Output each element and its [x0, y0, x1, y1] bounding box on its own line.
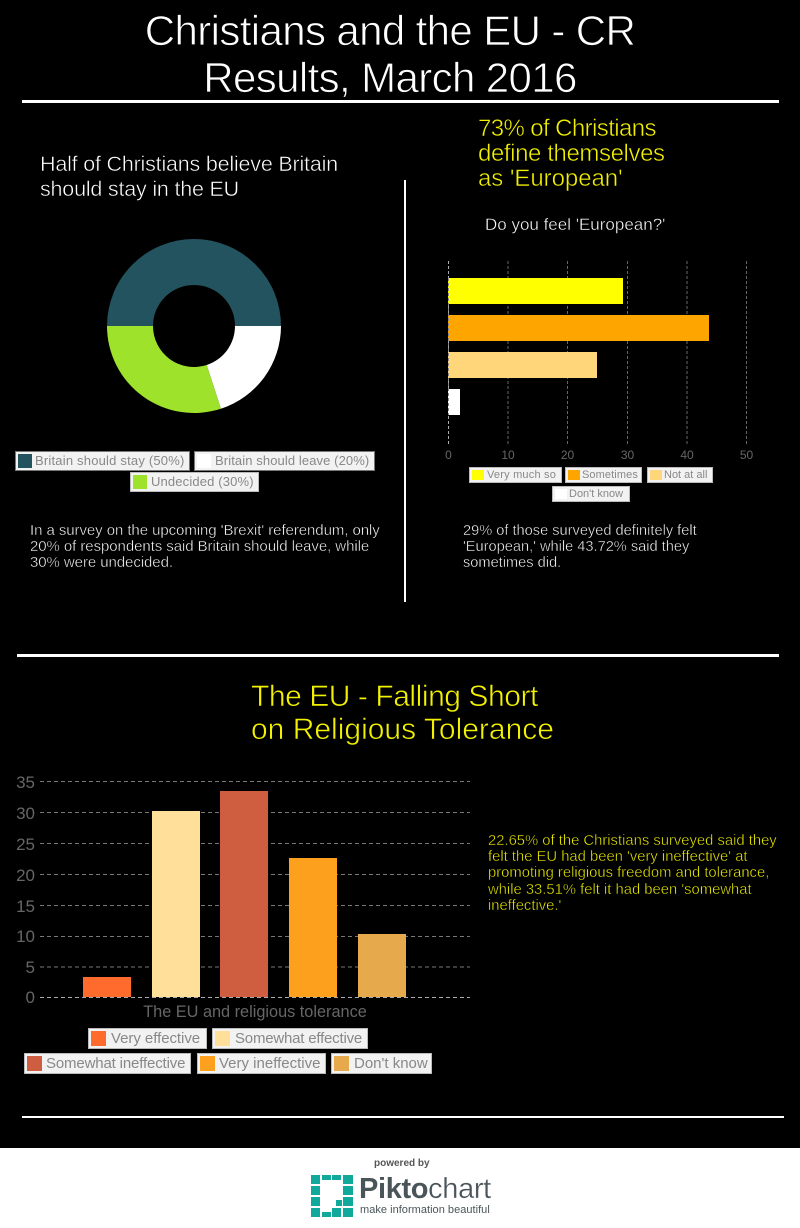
text: tolerance result	[488, 833, 777, 914]
bar chart: EU and religious tolerance: 35	[16, 773, 35, 792]
legend: tolerance bars: Very effective	[111, 1030, 200, 1047]
heading: 73% of Christians: as 'European'	[478, 165, 623, 192]
bar chart: do you feel European: 40	[680, 448, 694, 462]
legend: tolerance bars: Somewhat effective	[235, 1030, 362, 1047]
bar chart: do you feel European: 20	[561, 448, 574, 462]
legend: donut: Undecided (30%)	[151, 474, 254, 489]
text: tolerance result: while 33.51% felt it had been 'somewhat	[488, 882, 752, 898]
text: tolerance result: promoting religious freedom and tolerance,	[488, 865, 769, 881]
bar chart: EU and religious tolerance: 20	[16, 866, 35, 885]
legend: donut	[15, 451, 375, 492]
text: Brexit survey: 20% of respondents said Britain should leave, while	[30, 538, 369, 555]
bar chart: EU and religious tolerance: 25	[16, 835, 35, 854]
legend: European bars: Don't know	[569, 488, 623, 500]
legend: tolerance bars: Don't know	[354, 1055, 428, 1072]
bar chart: EU and religious tolerance: The EU and religious tolerance	[143, 1003, 367, 1021]
subheading: do you feel European: Do you feel 'European?'	[485, 215, 665, 234]
bar chart: do you feel European: 0	[445, 448, 452, 462]
legend: donut: Britain should stay (50%)	[35, 453, 185, 468]
text: tagline: make information beautiful	[360, 1204, 490, 1216]
bar chart: do you feel European: 30	[621, 448, 634, 462]
text: Brexit survey	[30, 522, 380, 571]
text: powered by: powered by	[374, 1158, 430, 1169]
heading: half of Christians: Half of Christians believe Britain	[40, 152, 338, 176]
bar chart: do you feel European: 10	[501, 448, 515, 462]
heading: falling short	[251, 680, 554, 746]
text: European result: 'European,' while 43.72% said they	[463, 539, 689, 555]
heading: falling short: The EU - Falling Short	[251, 680, 538, 713]
title: Christians and the EU - CR	[145, 7, 635, 54]
icon: Piktochart logo	[311, 1175, 353, 1217]
text: Piktochart wordmark: Piktochart	[359, 1173, 491, 1205]
heading: half of Christians: should stay in the EU	[40, 177, 239, 201]
legend: tolerance bars: Somewhat ineffective	[46, 1055, 185, 1072]
footer: Piktochart	[0, 1148, 800, 1228]
text: tolerance result: felt the EU had been 'very ineffective' at	[488, 849, 748, 865]
heading: half of Christians	[40, 152, 338, 201]
legend: European bars: Very much so	[487, 469, 556, 481]
bar chart: EU and religious tolerance: 15	[16, 897, 35, 916]
bar chart: do you feel European: 50	[740, 448, 753, 462]
legend: European bars: Sometimes	[582, 469, 638, 481]
bar chart: EU and religious tolerance: 0	[26, 988, 35, 1007]
text: Brexit survey: 30% were undecided.	[30, 554, 173, 571]
heading: 73% of Christians: 73% of Christians	[478, 115, 656, 142]
heading: falling short: on Religious Tolerance	[251, 713, 554, 746]
title: Results, March 2016	[203, 54, 577, 101]
text: tolerance result: ineffective.'	[488, 898, 561, 914]
text: tolerance result: 22.65% of the Christians surveyed said they	[488, 833, 777, 849]
title	[145, 7, 635, 101]
legend: donut: Britain should leave (20%)	[215, 453, 369, 468]
legend: tolerance bars: Very ineffective	[219, 1055, 320, 1072]
legend: European bars: Not at all	[664, 469, 707, 481]
bar chart: EU and religious tolerance: 10	[16, 927, 35, 946]
text: Brexit survey: In a survey on the upcoming 'Brexit' referendum, only	[30, 522, 380, 539]
text: European result: sometimes did.	[463, 555, 561, 571]
text: European result: 29% of those surveyed definitely felt	[463, 523, 697, 539]
bar chart: EU and religious tolerance: 5	[26, 958, 35, 977]
legend: tolerance bars	[24, 1028, 432, 1074]
text: European result	[463, 523, 697, 571]
bar chart: EU and religious tolerance: 30	[16, 804, 35, 823]
heading: 73% of Christians	[478, 115, 665, 192]
heading: 73% of Christians: define themselves	[478, 140, 665, 167]
legend: European bars	[469, 467, 713, 502]
